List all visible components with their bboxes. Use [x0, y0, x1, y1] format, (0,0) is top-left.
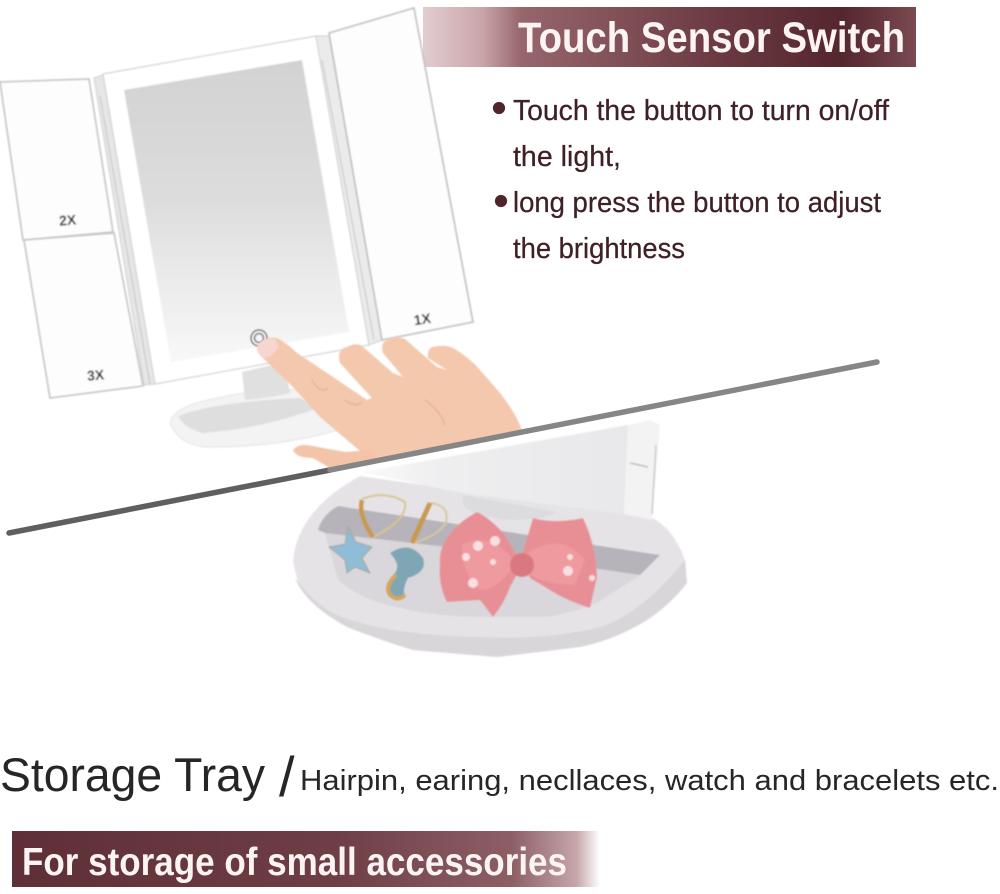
- right panel 1X: [329, 8, 473, 340]
- right hinge: [316, 36, 382, 345]
- mirror neck: [463, 495, 557, 520]
- bullet 2: [495, 195, 507, 207]
- earring: starfish: [329, 495, 405, 573]
- tray back wall: [318, 506, 660, 575]
- illustration: tri-fold mirror: [0, 8, 473, 447]
- left hinge: [94, 75, 155, 385]
- heading: storage tray: Storage Tray: [0, 748, 265, 801]
- left panel 3X: [24, 233, 143, 398]
- heading: storage tray: [0, 745, 999, 808]
- banner text: For storage of small accessories: [22, 841, 567, 884]
- diagonal divider: [9, 362, 877, 533]
- label 3X: 3X: [86, 366, 105, 384]
- banner: touch sensor switch: [423, 7, 916, 67]
- text block: touch instructions: [493, 95, 890, 265]
- stand and base: [170, 362, 345, 447]
- tray front rim: [295, 560, 687, 657]
- line 3: long press the button to adjust: [513, 187, 881, 219]
- touch button icon: [251, 330, 267, 346]
- lower mirror section: [362, 425, 628, 514]
- left panel 2X: [0, 79, 113, 240]
- lower mirror hinge: [624, 420, 660, 520]
- earring: seahorse: [387, 503, 447, 599]
- bullet 1: [493, 102, 505, 114]
- center frame: [103, 36, 369, 384]
- banner: small accessories: [12, 831, 600, 887]
- tray body: [293, 476, 687, 657]
- illustration: storage tray with accessories: [293, 420, 687, 657]
- label 1X: 1X: [413, 310, 433, 328]
- line 2: the light,: [513, 141, 621, 173]
- bow: [440, 512, 597, 617]
- label 2X: 2X: [58, 211, 77, 229]
- line 4: the brightness: [513, 233, 685, 265]
- line 1: Touch the button to turn on/off: [513, 95, 890, 127]
- accessories list: Hairpin, earing, necllaces, watch and bracelets etc.: [300, 765, 999, 797]
- illustration: hand pressing button: [257, 337, 522, 470]
- center mirror: [124, 60, 349, 362]
- heading: touch sensor switch: Touch Sensor Switch: [518, 14, 905, 62]
- slash: /: [279, 745, 295, 808]
- tray well floor: [325, 530, 640, 617]
